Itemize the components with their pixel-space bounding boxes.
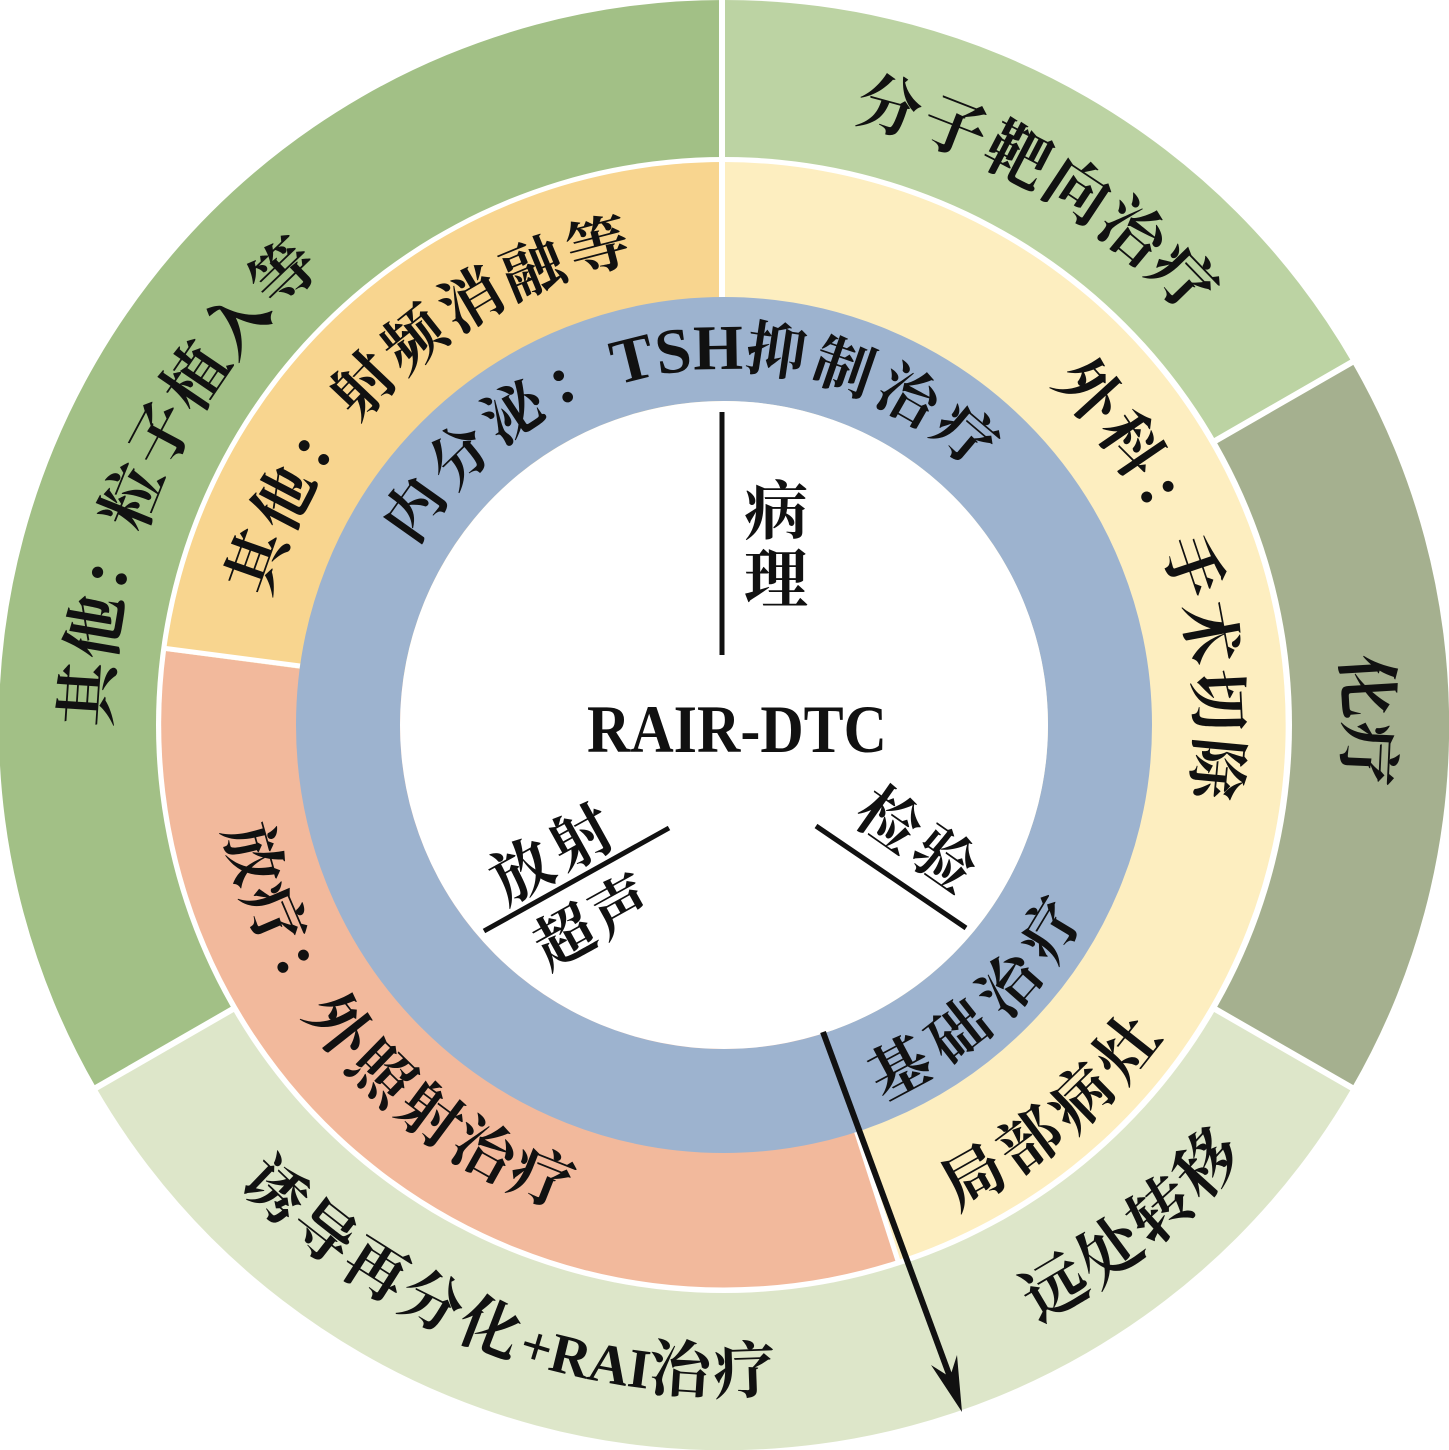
text: pathology: 病 (744, 477, 808, 548)
text: radiology: 放射 (479, 792, 631, 917)
label: distant metastasis: 远处转移 (1016, 1126, 1232, 1324)
label: basic treatment: 基础治疗 (866, 894, 1077, 1102)
segment: radiotherapy (161, 651, 898, 1288)
middle ring: local treatment segments (161, 162, 1286, 1288)
label: chemotherapy: 化疗 (1338, 656, 1400, 786)
segment: other, ablation (166, 162, 724, 725)
segment: chemotherapy (724, 362, 1449, 1088)
text: pathology: 理 (744, 545, 808, 616)
label: other, seed implantation: 其他：粒子植入等 (55, 235, 312, 726)
label: other, ablation: 其他：射频消融等 (223, 214, 628, 598)
label: surgery: 外科：手术切除 (1049, 357, 1248, 800)
divider: pathology (720, 412, 724, 655)
text: pathology (744, 477, 808, 616)
segment: targeted therapy (724, 0, 1352, 725)
text: laboratory: 检验 (843, 776, 993, 909)
label: redifferentiation plus RAI: 诱导再分化+RAI治疗 (244, 1150, 773, 1400)
centre disc (400, 401, 1048, 1049)
divider: imaging (484, 828, 669, 931)
title: RAIR-DTC: RAIR-DTC (587, 692, 887, 767)
divider: laboratory (816, 826, 966, 928)
label: targeted therapy: 分子靶向治疗 (855, 73, 1220, 304)
segment: surgery (724, 162, 1286, 1260)
arrow: progression (823, 1032, 962, 1412)
inner ring: basic treatment (348, 349, 1100, 1101)
segment: other, seed implantation (0, 0, 724, 1088)
label: endocrine TSH suppression: 内分泌：TSH抑制治疗 (383, 318, 1000, 544)
label: radiotherapy: 放疗：外照射治疗 (219, 821, 577, 1205)
label: local lesion: 局部病灶 (940, 1016, 1164, 1214)
segment: distant metastasis and redifferentiation (96, 725, 1352, 1450)
text: ultrasound: 超声 (523, 862, 667, 982)
